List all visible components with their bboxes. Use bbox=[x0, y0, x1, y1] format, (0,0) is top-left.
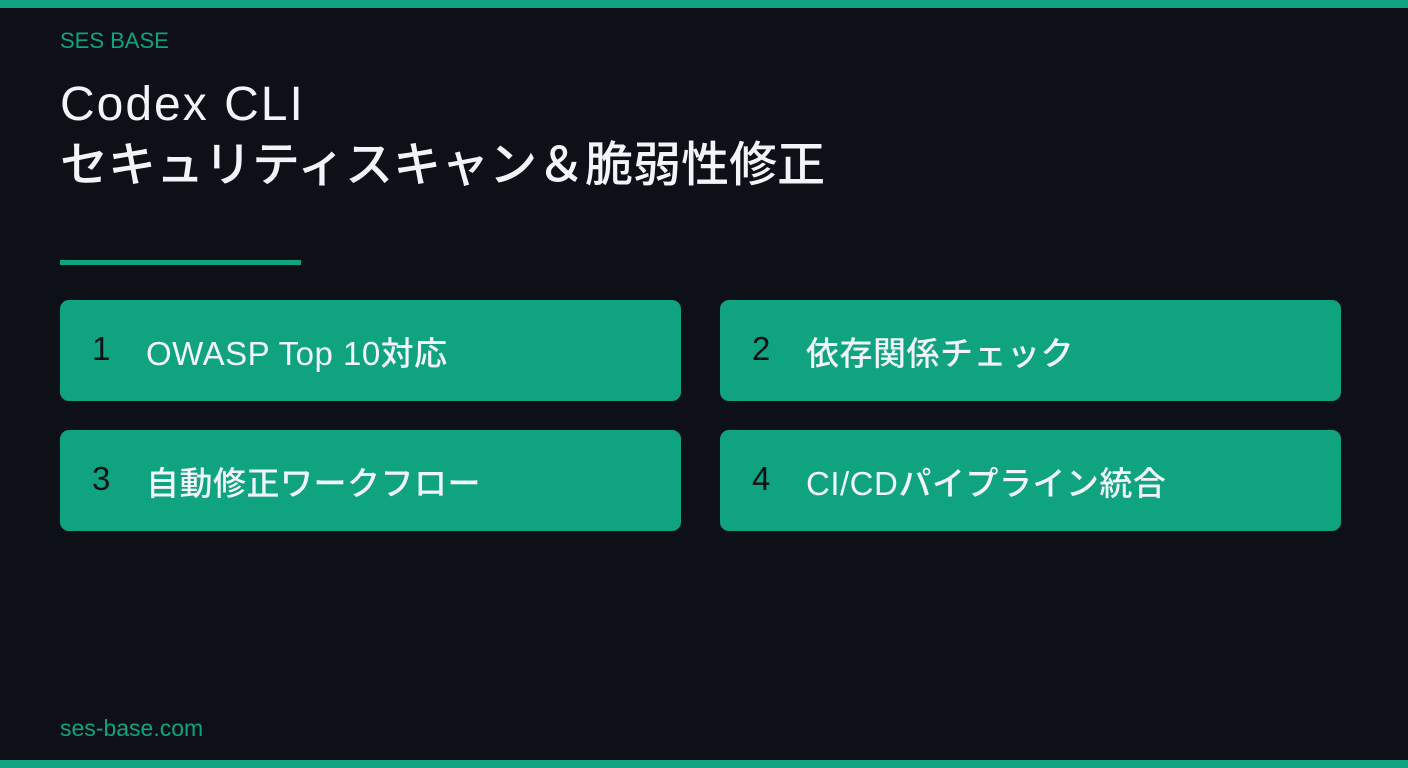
card 2: 2 bbox=[752, 330, 770, 367]
card 3 bbox=[60, 430, 681, 531]
card 1 bbox=[60, 300, 681, 401]
card 4: 4 bbox=[752, 460, 770, 497]
title: セキュリティスキャン＆脆弱性修正 bbox=[60, 139, 825, 192]
card 3: 3 bbox=[92, 460, 110, 497]
footer url: ses-base.com bbox=[60, 715, 203, 741]
card 1: OWASP Top 10対応 bbox=[146, 335, 448, 372]
brand label: SES BASE bbox=[60, 28, 169, 53]
card 1: 1 bbox=[92, 330, 110, 367]
title bbox=[60, 78, 825, 192]
card 4 bbox=[720, 430, 1341, 531]
card 4: CI/CDパイプライン統合 bbox=[806, 465, 1166, 502]
card 3: 自動修正ワークフロー bbox=[146, 465, 481, 502]
card 2 bbox=[720, 300, 1341, 401]
title: Codex CLI bbox=[60, 78, 305, 131]
card 2: 依存関係チェック bbox=[806, 335, 1074, 372]
